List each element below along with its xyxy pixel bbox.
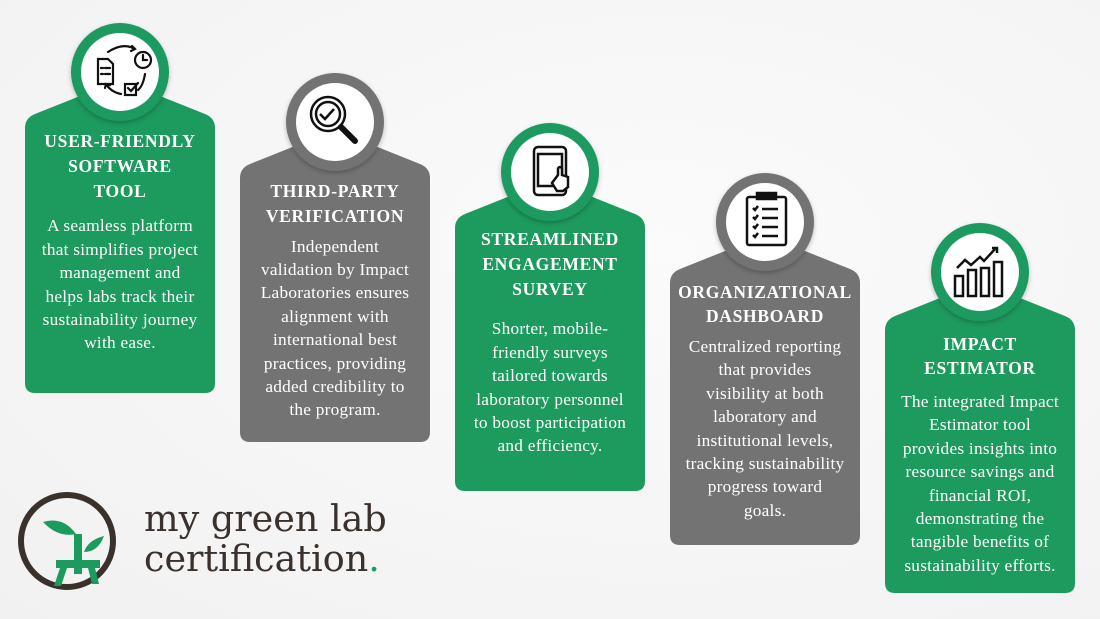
logo text	[144, 497, 387, 580]
card 3	[455, 123, 645, 491]
card 4 text: goals.	[744, 501, 786, 520]
card 3 text: to boost participation	[474, 413, 626, 432]
card 2 text: alignment with	[281, 307, 389, 326]
icon: workflow cycle	[98, 46, 151, 95]
card 5 text: resource savings and	[906, 462, 1054, 481]
card 2 text	[261, 181, 409, 419]
card 5 text	[901, 334, 1059, 575]
card 1 text: sustainability journey	[43, 310, 197, 329]
card 1 text: that simplifies project	[42, 240, 198, 259]
card 4 text: that provides	[718, 360, 812, 379]
card 3 text: and efficiency.	[498, 436, 602, 455]
card 1 text: management and	[59, 263, 181, 282]
card 1 text: A seamless platform	[47, 216, 193, 235]
card 2 text: Laboratories ensures	[261, 283, 409, 302]
card 4 text: ORGANIZATIONAL	[678, 282, 852, 302]
icon: magnifier	[311, 97, 355, 141]
card 3 text: SURVEY	[512, 279, 588, 299]
card 1 text	[42, 131, 198, 352]
card 5 text: provides insights into	[903, 439, 1057, 458]
card 4 text: laboratory and	[713, 407, 817, 426]
card 2 text: Independent	[291, 237, 379, 256]
card 1 text: with ease.	[84, 333, 156, 352]
card 3 text: ENGAGEMENT	[482, 254, 618, 274]
card 4 text: institutional levels,	[697, 431, 833, 450]
card 4 text: tracking sustainability	[686, 454, 844, 473]
card 4 text	[678, 282, 852, 520]
icon: clipboard	[747, 193, 786, 245]
card 2 text: the program.	[289, 400, 381, 419]
card 2	[240, 73, 430, 442]
card 5 text: Estimator tool	[929, 415, 1031, 434]
card 5 text: The integrated Impact	[901, 392, 1059, 411]
card 3 text: tailored towards	[492, 366, 608, 385]
card 1 text: SOFTWARE	[68, 156, 172, 176]
logo	[18, 492, 387, 590]
card 2 text: THIRD-PARTY	[270, 181, 400, 201]
card 3 text: STREAMLINED	[481, 229, 619, 249]
card 2 text: VERIFICATION	[266, 206, 404, 226]
card 5 text: IMPACT	[943, 334, 1017, 354]
icon: tablet	[534, 147, 568, 195]
card 4	[670, 173, 860, 545]
logo icon	[18, 492, 116, 590]
card 5 text: financial ROI,	[929, 486, 1031, 505]
card 2 text: international best	[273, 330, 397, 349]
card 5 text: sustainability efforts.	[904, 556, 1056, 575]
card 3 text: laboratory personnel	[476, 390, 624, 409]
card 5 text: ESTIMATOR	[924, 358, 1036, 378]
icon: bar chart	[955, 248, 1002, 296]
card 2 text: validation by Impact	[261, 260, 409, 279]
card 1 text: helps labs track their	[46, 287, 194, 306]
card 1 text: TOOL	[93, 181, 147, 201]
card 2 text: practices, providing	[264, 354, 406, 373]
card 4 text: Centralized reporting	[689, 337, 841, 356]
card 3 text	[474, 229, 626, 455]
card 3 text: Shorter, mobile-	[492, 319, 608, 338]
card 2 text: added credibility to	[265, 377, 405, 396]
card 5 text: tangible benefits of	[911, 532, 1049, 551]
card 1 text: USER-FRIENDLY	[44, 131, 196, 151]
card 5	[885, 223, 1075, 593]
card 4 text: progress toward	[708, 477, 822, 496]
logo text: certification.	[144, 537, 380, 580]
card 4 text: DASHBOARD	[706, 306, 824, 326]
logo text: my green lab	[144, 497, 387, 540]
card 4 text: visibility at both	[706, 384, 824, 403]
card 3 text: friendly surveys	[492, 343, 608, 362]
card 1	[25, 23, 215, 393]
card 5 text: demonstrating the	[916, 509, 1044, 528]
